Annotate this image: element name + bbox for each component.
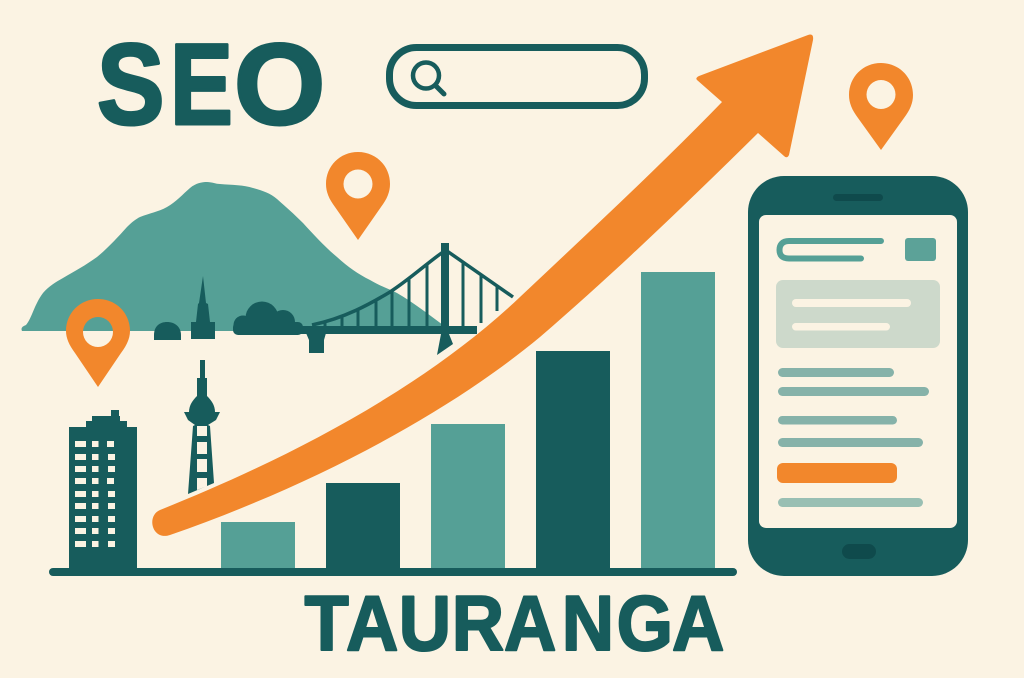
screen button square (905, 238, 936, 261)
bar chart (221, 272, 715, 570)
bar 3 (431, 424, 505, 570)
location pin: top right (849, 63, 913, 150)
observation tower (184, 360, 220, 494)
growth arrow (152, 35, 813, 536)
phone screen (759, 215, 957, 528)
phone home button (842, 544, 876, 559)
bar 4 (536, 351, 610, 570)
bar 1 (221, 522, 295, 570)
search field on screen (780, 241, 881, 258)
title: SEO (97, 20, 325, 149)
bar 5 (641, 272, 715, 570)
smartphone (748, 176, 968, 576)
baseline (49, 568, 737, 576)
bar 2 (326, 483, 400, 570)
location pin: mountain (326, 152, 390, 240)
search bar (390, 48, 644, 106)
church spire (191, 276, 215, 339)
suspension bridge (295, 243, 513, 355)
highlighted result panel (776, 280, 940, 348)
title: SEO: S (97, 20, 164, 148)
footer line (778, 498, 923, 507)
small dome building (154, 322, 181, 340)
bush silhouette (233, 302, 303, 335)
title: SEO: O (234, 20, 325, 149)
icon: magnifying glass (413, 62, 444, 94)
result lines (778, 368, 929, 447)
orange call-to-action button (777, 463, 897, 483)
mountain silhouette (22, 182, 443, 331)
location pin: left (66, 299, 130, 387)
title: TAURANGA: TAURANGA (304, 580, 724, 667)
phone speaker (833, 194, 883, 201)
high-rise building (69, 410, 137, 570)
title: SEO: E (170, 21, 233, 149)
